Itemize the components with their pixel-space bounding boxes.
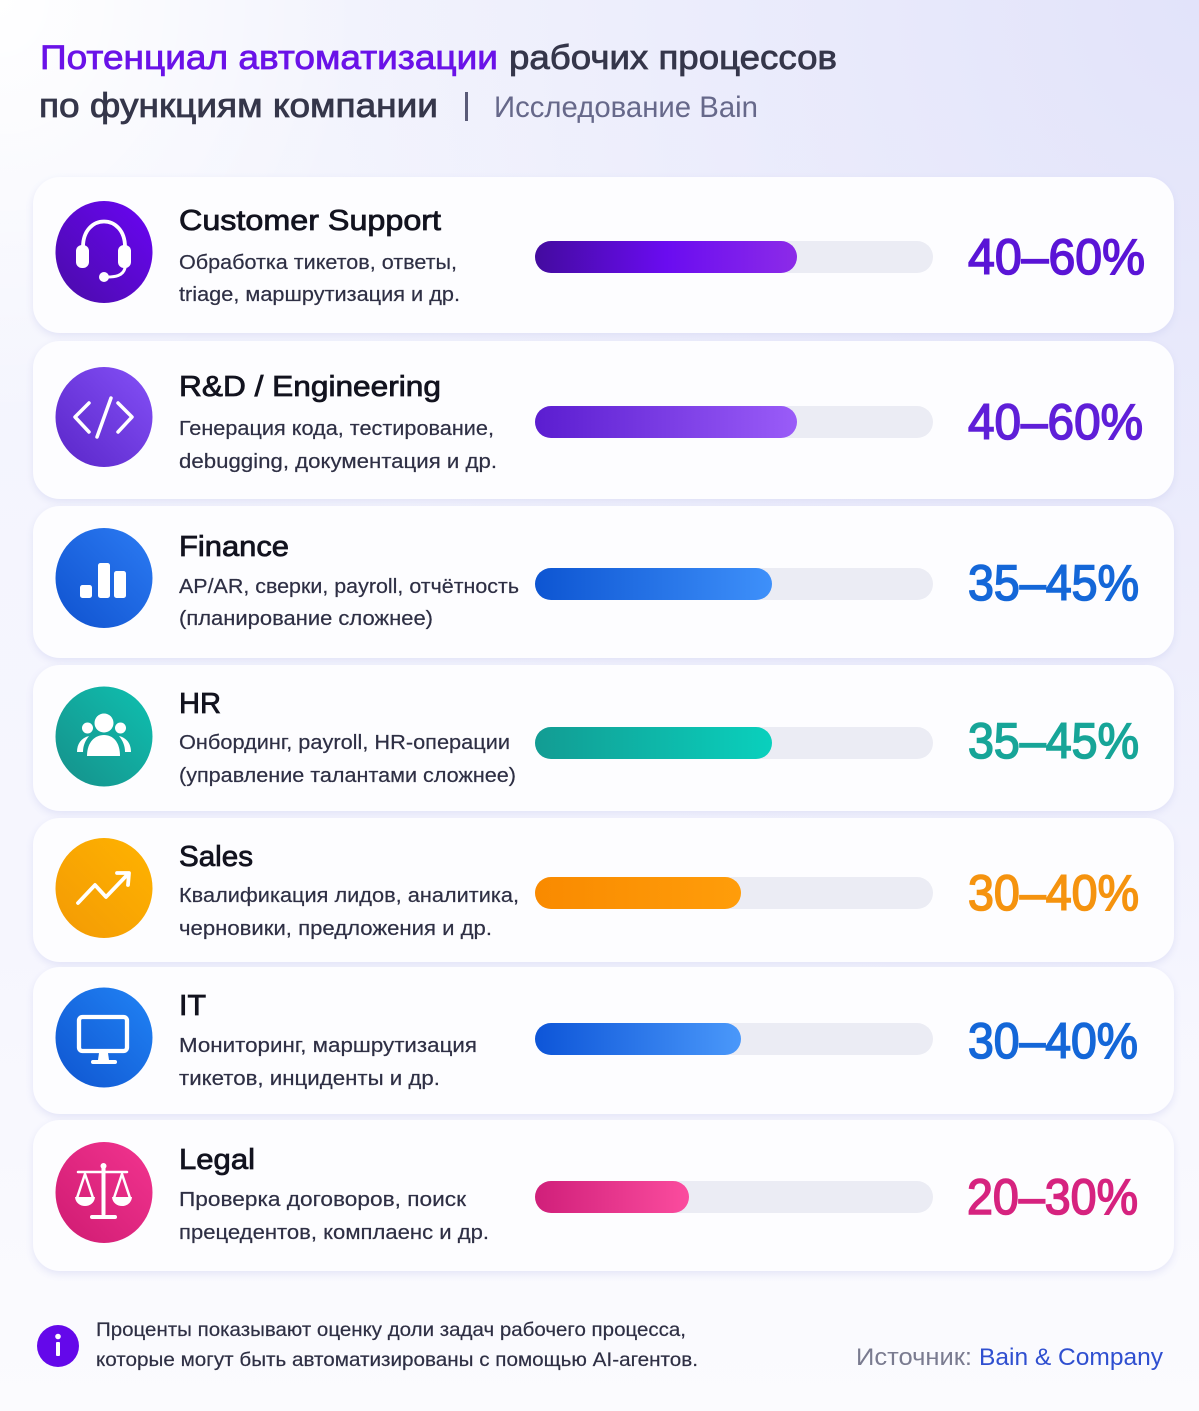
panel: R&D / Engineering: debugging, документация и др. bbox=[179, 450, 497, 473]
panel: Finance: (планирование сложнее) bbox=[179, 607, 433, 630]
panel: HR: Онбординг, payroll, HR-операции bbox=[179, 731, 510, 754]
icon: headset bbox=[56, 201, 152, 303]
panel: Finance bbox=[33, 506, 1174, 658]
progress bar bbox=[535, 727, 933, 759]
panel: Sales: Sales bbox=[179, 841, 253, 873]
source bbox=[856, 1344, 1163, 1371]
progress bar bbox=[535, 1023, 933, 1055]
progress bar bbox=[535, 1181, 933, 1213]
panel: Sales: Квалификация лидов, аналитика, bbox=[179, 884, 519, 907]
panel: Sales bbox=[33, 818, 1174, 962]
icon: people bbox=[56, 686, 152, 786]
panel: Legal: Проверка договоров, поиск bbox=[179, 1188, 467, 1211]
panel: Customer Support: 40–60% bbox=[968, 229, 1145, 285]
panel: Finance: 35–45% bbox=[968, 555, 1139, 611]
footnote: Проценты показывают оценку доли задач рабочего процесса, bbox=[96, 1319, 686, 1341]
panel: Legal bbox=[33, 1120, 1174, 1271]
panel: Sales: черновики, предложения и др. bbox=[179, 917, 492, 940]
title bbox=[39, 39, 837, 125]
panel: Sales: 30–40% bbox=[968, 865, 1139, 921]
panel: HR bbox=[33, 665, 1174, 811]
title: рабочих процессов bbox=[509, 39, 837, 77]
progress bar bbox=[535, 241, 933, 273]
icon: info bbox=[37, 1325, 79, 1367]
icon: monitor bbox=[56, 988, 152, 1088]
panel: HR: 35–45% bbox=[968, 713, 1139, 769]
source: Источник: bbox=[856, 1344, 972, 1371]
panel: R&D / Engineering bbox=[33, 341, 1174, 499]
panel: R&D / Engineering: 40–60% bbox=[968, 394, 1143, 450]
title: Исследование Bain bbox=[494, 91, 758, 124]
panel: R&D / Engineering: R&D / Engineering bbox=[179, 371, 441, 403]
panel: Legal: прецедентов, комплаенс и др. bbox=[179, 1221, 489, 1244]
panel: Customer Support bbox=[33, 177, 1174, 333]
icon: trend arrow bbox=[56, 838, 152, 938]
icon: code bbox=[56, 367, 152, 467]
title: по функциям компании bbox=[39, 87, 438, 125]
panel: IT: IT bbox=[179, 990, 206, 1022]
panel: HR: HR bbox=[179, 688, 221, 720]
panel: IT: 30–40% bbox=[968, 1013, 1138, 1069]
panel: Legal: Legal bbox=[179, 1144, 255, 1176]
panel: Customer Support: Customer Support bbox=[179, 205, 441, 237]
panel: Customer Support: triage, маршрутизация и др. bbox=[179, 283, 460, 306]
progress bar bbox=[535, 568, 933, 600]
panel: IT: тикетов, инциденты и др. bbox=[179, 1067, 440, 1090]
title: Потенциал автоматизации bbox=[40, 39, 498, 77]
progress bar bbox=[535, 877, 933, 909]
icon: scales bbox=[56, 1142, 152, 1243]
panel: IT bbox=[33, 967, 1174, 1114]
panel: Customer Support: Обработка тикетов, ответы, bbox=[179, 251, 457, 274]
panel: Finance: Finance bbox=[179, 531, 289, 563]
footnote bbox=[96, 1319, 698, 1371]
panel: Finance: AP/AR, сверки, payroll, отчётность bbox=[179, 575, 519, 598]
progress bar bbox=[535, 406, 933, 438]
panel: R&D / Engineering: Генерация кода, тестирование, bbox=[179, 417, 494, 440]
panel: IT: Мониторинг, маршрутизация bbox=[179, 1034, 477, 1057]
source: Bain & Company bbox=[979, 1344, 1163, 1371]
footnote: которые могут быть автоматизированы с помощью AI-агентов. bbox=[96, 1349, 698, 1371]
panel: Legal: 20–30% bbox=[967, 1169, 1138, 1225]
icon: bar chart bbox=[56, 528, 152, 628]
panel: HR: (управление талантами сложнее) bbox=[179, 764, 516, 787]
